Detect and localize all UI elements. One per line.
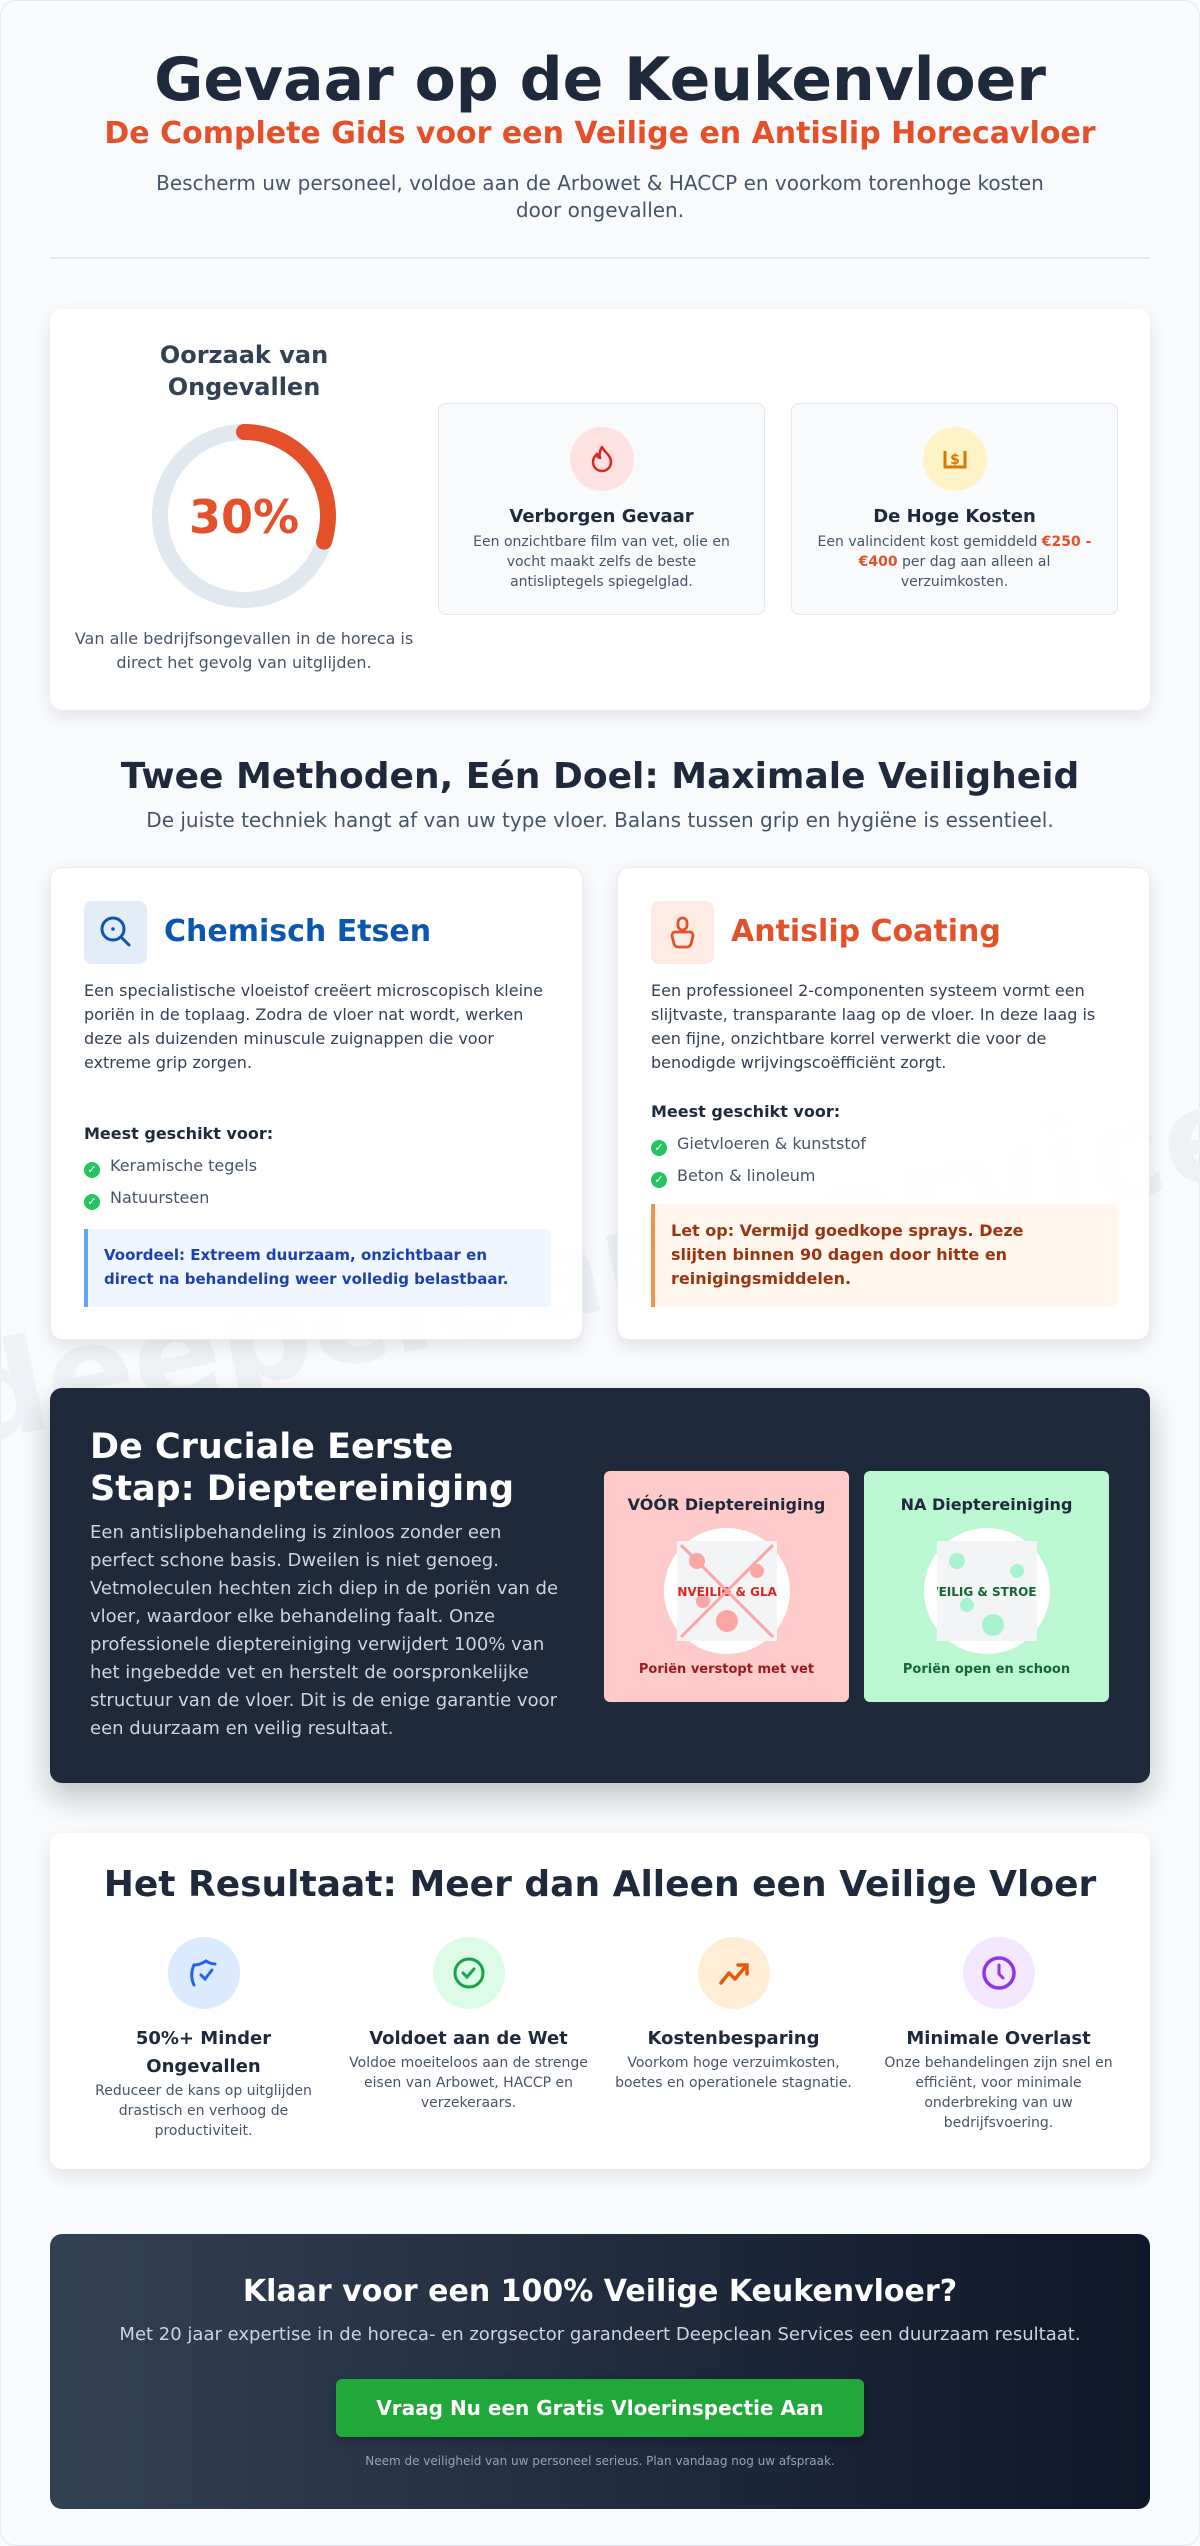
result: wet	[349, 1937, 588, 2111]
title: Chemisch Etsen	[164, 914, 431, 949]
panel: chemisch etsen	[50, 867, 583, 1340]
card: na: NA Dieptereiniging	[901, 1495, 1072, 1514]
title: Gevaar op de Keukenvloer	[154, 45, 1046, 115]
illustration: clean pores	[924, 1528, 1050, 1654]
list: suitable: ✓	[87, 1163, 97, 1176]
footnote: Neem de veiligheid van uw personeel serieus. Plan vandaag nog uw afspraak.	[365, 2454, 835, 2468]
heading: oorzaak: Oorzaak van	[160, 341, 328, 369]
card: voor: Poriën verstopt met vet	[639, 1662, 814, 1677]
result: kostenbesparing: Voorkom hoge verzuimkosten, boetes en operationele stagnatie.	[615, 2055, 852, 2091]
card: voor: VÓÓR Dieptereiniging	[628, 1495, 825, 1514]
list: suitable: Natuursteen	[110, 1188, 209, 1207]
illustration: clogged pores	[664, 1528, 790, 1654]
donut chart 30%: 30%	[189, 490, 299, 544]
list: suitable	[84, 1124, 273, 1210]
list: suitable: ✓	[654, 1141, 664, 1154]
intro text: Bescherm uw personeel, voldoe aan de Arbowet & HACCP en voorkom torenhoge kosten door ongevallen.	[156, 171, 1044, 222]
panel: dieptereiniging	[50, 1388, 1150, 1783]
callout: let op	[651, 1204, 1118, 1307]
button	[336, 2379, 864, 2437]
list: suitable: Keramische tegels	[110, 1156, 257, 1175]
list: suitable: ✓	[87, 1195, 97, 1208]
paragraph: Een antislipbehandeling is zinloos zonder een perfect schone basis. Dweilen is niet genoeg. Vetmoleculen hechten zich diep in de poriën van de vloer, waardoor elke behandeling faalt. Onze professionele dieptereiniging verwijdert 100% van het ingebedde vet en herstelt de oorspronkelijke structuur van de vloer. Dit is de enige garantie voor een duurzaam en veilig resultaat.	[90, 1522, 558, 1739]
icon: flame	[570, 427, 634, 491]
card: voor	[604, 1471, 849, 1702]
result: minder ongevallen: Ongevallen	[146, 2056, 261, 2077]
list: suitable: Beton & linoleum	[677, 1166, 816, 1185]
card: hoge kosten	[791, 403, 1118, 615]
result: kostenbesparing	[615, 1937, 852, 2091]
text: Een valincident kost gemiddeld €250 - €400 per dag aan alleen al verzuimkosten.	[818, 534, 1091, 590]
card: na: Poriën open en schoon	[903, 1662, 1070, 1677]
result: overlast: Onze behandelingen zijn snel en efficiënt, voor minimale onderbreking van uw bedrijfsvoering.	[884, 2055, 1113, 2131]
description: Een specialistische vloeistof creëert microscopisch kleine poriën in de toplaag. Zodra de vloer nat wordt, werken deze als duizenden minuscule zuignappen die voor extreme grip zorgen.	[84, 981, 543, 1072]
list: suitable: Gietvloeren & kunststof	[677, 1134, 866, 1153]
result: overlast	[884, 1937, 1113, 2131]
description: Een professioneel 2-componenten systeem vormt een slijtvaste, transparante laag op de vloer. In deze laag is een fijne, onzichtbare korrel verwerkt die voor de benodigde wrijvingscoëfficiënt zorgt.	[651, 981, 1095, 1072]
button: Vraag Nu een Gratis Vloerinspectie Aan	[376, 2396, 824, 2420]
result: overlast: Minimale Overlast	[906, 2028, 1091, 2049]
panel: causes	[50, 309, 1150, 710]
list: suitable: Meest geschikt voor:	[84, 1124, 273, 1143]
result: minder ongevallen: Reduceer de kans op uitglijden drastisch en verhoog de productiviteit.	[95, 2083, 312, 2139]
callout: voordeel: Voordeel: Extreem duurzaam, onzichtbaar en direct na behandeling weer volledig belastbaar.	[104, 1246, 508, 1288]
heading: methods: Twee Methoden, Eén Doel: Maximale Veiligheid	[121, 756, 1079, 797]
list: suitable	[651, 1102, 866, 1188]
result: minder ongevallen: 50%+ Minder	[136, 2028, 271, 2049]
donut caption: Van alle bedrijfsongevallen in de horeca is direct het gevolg van uitglijden.	[75, 629, 413, 672]
illustration: clean pores: VEILIG & STROEF	[929, 1585, 1045, 1599]
donut chart 30%	[152, 424, 336, 608]
heading: Het Resultaat: Meer dan Alleen een Veilige Vloer	[104, 1864, 1096, 1905]
title: Verborgen Gevaar	[509, 506, 694, 527]
text: Een onzichtbare film van vet, olie en vocht maakt zelfs de beste antisliptegels spiegelglad.	[473, 534, 730, 590]
card: na	[864, 1471, 1109, 1702]
result: minder ongevallen	[95, 1937, 312, 2139]
card: verborgen gevaar	[438, 403, 765, 615]
panel: results	[50, 1833, 1150, 2169]
callout: voordeel	[84, 1229, 551, 1307]
list: suitable: Meest geschikt voor:	[651, 1102, 840, 1121]
list: suitable: ✓	[654, 1173, 664, 1186]
panel: antislip coating	[617, 867, 1150, 1340]
callout: let op: Let op: Vermijd goedkope sprays. Deze slijten binnen 90 dagen door hitte en reinigingsmiddelen.	[671, 1221, 1024, 1288]
icon: money	[923, 427, 987, 491]
subtitle: De Complete Gids voor een Veilige en Antislip Horecavloer	[104, 116, 1096, 151]
illustration: clogged pores: ONVEILIG & GLAD	[667, 1585, 787, 1599]
heading: oorzaak	[160, 341, 328, 401]
result: kostenbesparing: Kostenbesparing	[648, 2028, 819, 2049]
title: De Cruciale Eerste Stap: Dieptereiniging	[90, 1427, 514, 1509]
panel: call to action	[50, 2234, 1150, 2509]
methods subtitle: De juiste techniek hangt af van uw type vloer. Balans tussen grip en hygiëne is essentieel.	[146, 808, 1054, 832]
title: Antislip Coating	[731, 914, 1001, 949]
cta title: Klaar voor een 100% Veilige Keukenvloer?	[243, 2274, 957, 2309]
cta subtitle: Met 20 jaar expertise in de horeca- en zorgsector garandeert Deepclean Services een duurzaam resultaat.	[119, 2324, 1081, 2345]
title: De Hoge Kosten	[873, 506, 1036, 527]
icon: magnifier	[84, 901, 147, 964]
icon: money: $	[950, 452, 960, 468]
icon: bottle	[651, 901, 714, 964]
result: wet: Voldoe moeiteloos aan de strenge eisen van Arbowet, HACCP en verzekeraars.	[349, 2055, 588, 2111]
result: wet: Voldoet aan de Wet	[369, 2028, 568, 2049]
heading: oorzaak: Ongevallen	[168, 373, 320, 401]
